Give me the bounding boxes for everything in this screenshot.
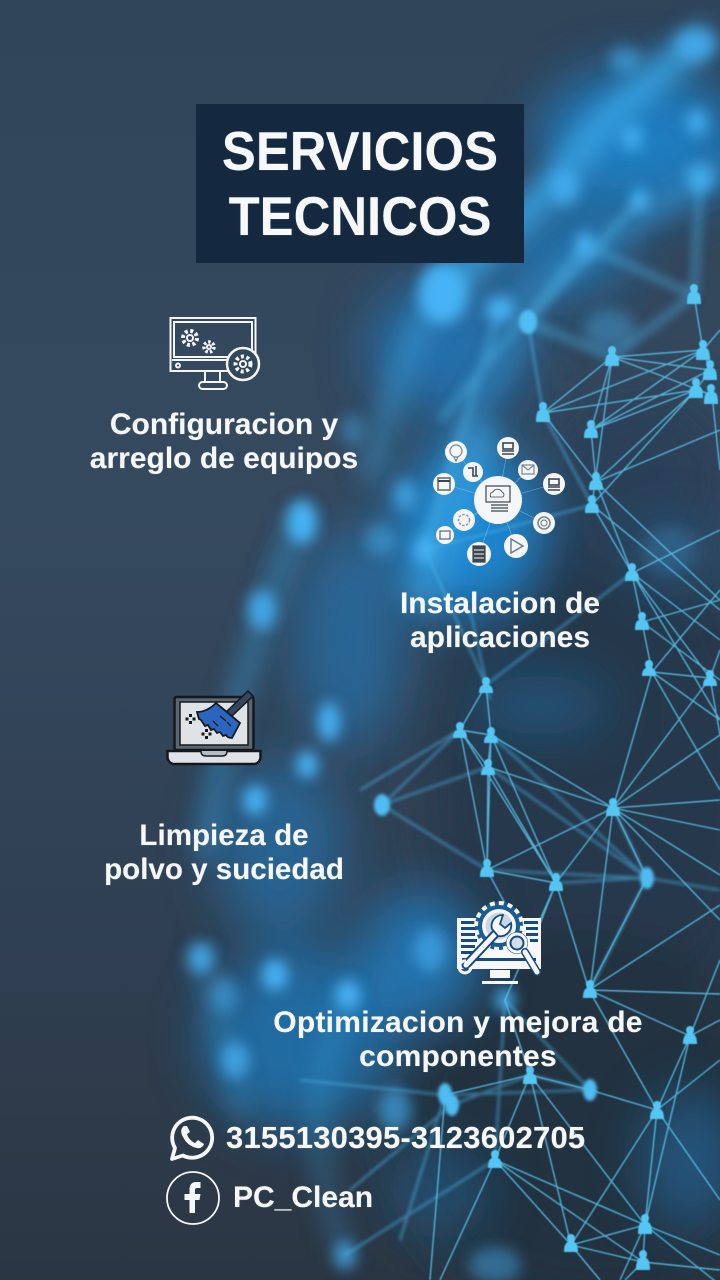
text: limpieza bbox=[104, 819, 344, 886]
large blue haze bbox=[205, 70, 720, 1240]
icon: application network bbox=[433, 437, 565, 566]
title text: SERVICIOS bbox=[222, 120, 498, 182]
title panel bbox=[196, 104, 524, 263]
title text: TECNICOS bbox=[229, 185, 491, 247]
text: configuracion: arreglo de equipos bbox=[90, 442, 358, 475]
text: instalacion: Instalacion de bbox=[400, 587, 600, 620]
icon: whatsapp bbox=[170, 1116, 214, 1161]
text: optimizacion: Optimizacion y mejora de bbox=[273, 1006, 643, 1039]
icon: monitor with gear, wrench and magnifier bbox=[457, 901, 541, 984]
crisp nodes bbox=[453, 284, 718, 1270]
blurred nodes bbox=[188, 29, 715, 1280]
icon: laptop with brush bbox=[166, 690, 262, 766]
text: instalacion bbox=[400, 587, 600, 654]
text: configuracion bbox=[90, 329, 358, 475]
blurred out-of-focus arcs bbox=[200, 40, 720, 1255]
text: instalacion: aplicaciones bbox=[410, 621, 590, 654]
text: limpieza: Limpieza de bbox=[139, 819, 309, 852]
icon: monitor with gears bbox=[170, 317, 260, 390]
text: optimizacion bbox=[273, 1006, 643, 1073]
text: optimizacion: componentes bbox=[359, 1040, 557, 1073]
text: configuracion: Configuracion y bbox=[110, 408, 338, 441]
contact: whatsapp bbox=[170, 1116, 585, 1161]
whatsapp numbers: 3155130395-3123602705 bbox=[226, 1120, 585, 1155]
text: limpieza: polvo y suciedad bbox=[104, 853, 344, 886]
sharp network lines bbox=[430, 295, 720, 1280]
icon: facebook bbox=[166, 1171, 220, 1225]
facebook handle: PC_Clean bbox=[233, 1181, 373, 1214]
soft lines bbox=[300, 322, 720, 1255]
blurred top network lines bbox=[425, 178, 700, 550]
semi-soft nodes bbox=[374, 310, 654, 1116]
contact: facebook bbox=[166, 1171, 373, 1225]
title text bbox=[222, 120, 498, 247]
dark lower right field bbox=[400, 340, 720, 1280]
